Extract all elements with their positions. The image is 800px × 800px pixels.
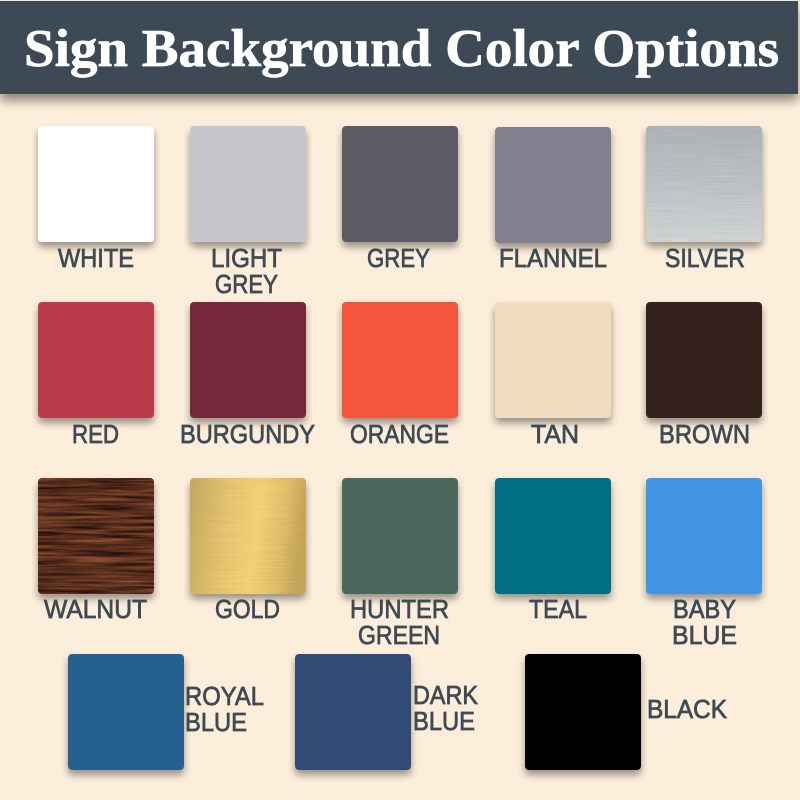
label: silver: SILVER — [665, 243, 745, 273]
label: white: WHITE — [58, 243, 134, 273]
label: hunter green — [350, 594, 449, 650]
label: dark blue: DARK — [413, 680, 479, 710]
swatch: baby blue — [646, 478, 762, 650]
label: light grey: LIGHT — [211, 243, 282, 273]
swatch: tan — [495, 302, 611, 449]
swatch: teal — [495, 478, 611, 624]
label: gold: GOLD — [215, 594, 280, 624]
swatch: light grey — [190, 126, 306, 299]
label: dark blue: BLUE — [413, 706, 475, 736]
label: hunter green: GREEN — [358, 620, 440, 650]
swatch: flannel — [495, 127, 611, 273]
label: light grey: GREY — [215, 269, 278, 299]
swatch: silver — [646, 126, 762, 273]
swatch: dark blue — [295, 654, 479, 770]
label: walnut: WALNUT — [44, 594, 147, 624]
label: burgundy: BURGUNDY — [180, 419, 315, 449]
label: teal: TEAL — [529, 594, 587, 624]
label: royal blue: ROYAL — [185, 681, 264, 711]
label: black: BLACK — [647, 694, 728, 724]
swatch: hunter green — [342, 478, 458, 650]
swatch: royal blue — [68, 654, 264, 770]
swatch: gold — [190, 478, 306, 624]
header banner — [0, 1, 798, 94]
label: brown: BROWN — [659, 419, 750, 449]
label: light grey — [211, 243, 282, 299]
label: hunter green: HUNTER — [350, 594, 449, 624]
swatch: burgundy — [180, 302, 315, 449]
swatch: walnut — [38, 478, 154, 624]
swatch: grey — [342, 126, 458, 273]
swatch: orange — [342, 302, 458, 449]
swatch: brown — [646, 302, 762, 449]
label: orange: ORANGE — [350, 419, 449, 449]
label: tan: TAN — [531, 419, 579, 449]
label: baby blue — [672, 594, 737, 650]
label: grey: GREY — [367, 243, 430, 273]
label: baby blue: BABY — [673, 594, 736, 624]
swatch: white — [38, 126, 154, 273]
label: royal blue: BLUE — [185, 707, 247, 737]
title: Sign Background Color Options — [24, 20, 779, 78]
swatch: red — [38, 302, 154, 449]
label: baby blue: BLUE — [672, 620, 737, 650]
label: flannel: FLANNEL — [499, 243, 607, 273]
label: red: RED — [72, 419, 119, 449]
label: royal blue — [185, 681, 264, 737]
swatch: black — [525, 654, 728, 770]
label: dark blue — [413, 680, 479, 736]
